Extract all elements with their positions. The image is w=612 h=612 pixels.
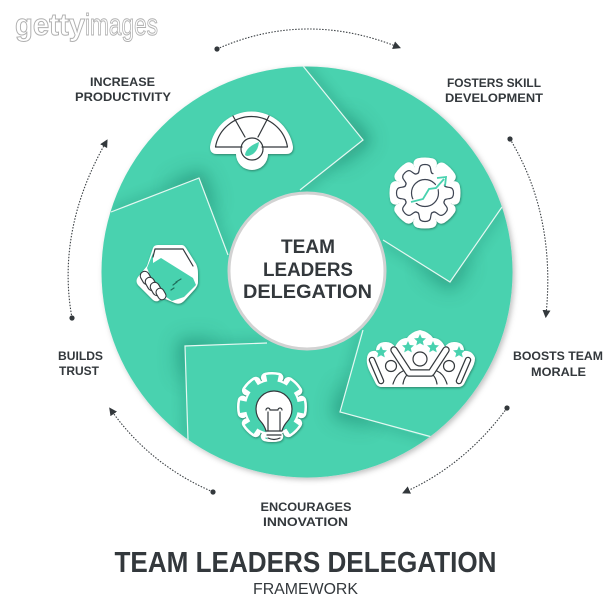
title [114,547,496,598]
label: boosts team morale: MORALE [531,367,586,379]
center circle [229,193,385,349]
label: builds trust: BUILDS [58,351,103,363]
center title: DELEGATION [243,281,372,303]
icon: team with stars [367,330,475,387]
stars [375,334,465,357]
fold shadow: lower right segment [340,330,432,437]
fold shadow: right segment [383,207,502,282]
arrow: increase productivity to fosters skill [214,29,398,52]
arrow: encourages innovation to builds trust [111,410,216,495]
label: boosts team morale: BOOSTS TEAM [513,351,603,363]
label: increase productivity: PRODUCTIVITY [75,92,171,104]
label: encourages innovation: INNOVATION [263,517,348,529]
label: fosters skill development: DEVELOPMENT [445,93,543,105]
label: fosters skill development: FOSTERS SKILL [447,78,541,90]
arrow: boosts team morale to encourages innovation [405,405,510,492]
icon: gear with growth arrow [389,157,461,229]
subtitle: FRAMEWORK [253,581,359,598]
segment edges [111,66,502,440]
label: encourages innovation: ENCOURAGES [260,502,352,514]
center title: TEAM [281,236,335,258]
label: builds trust: TRUST [59,366,99,378]
watermark: images [85,7,158,42]
label: increase productivity [75,77,171,104]
watermark: getty [15,7,86,42]
people [372,350,468,384]
panel: circular ring [102,66,512,478]
title: TEAM LEADERS DELEGATION [114,547,496,579]
icon: handshake [136,245,198,304]
center title: LEADERS [263,259,353,281]
fold shadow: top segment [300,66,363,190]
label: increase productivity: INCREASE [90,77,155,89]
icon: gauge with leaf [210,111,293,170]
watermark [15,7,158,42]
center title [243,236,372,303]
label: builds trust [58,351,103,378]
icon: lightbulb in gear [236,371,308,443]
arrow: builds trust to increase productivity [68,142,106,321]
fold shadow: left segment [111,178,228,255]
arrow: fosters skill to boosts team morale [507,136,548,315]
fold shadow: bottom segment [185,343,267,440]
label: encourages innovation [260,502,352,529]
label: fosters skill development [445,78,543,105]
label: boosts team morale [513,351,603,379]
